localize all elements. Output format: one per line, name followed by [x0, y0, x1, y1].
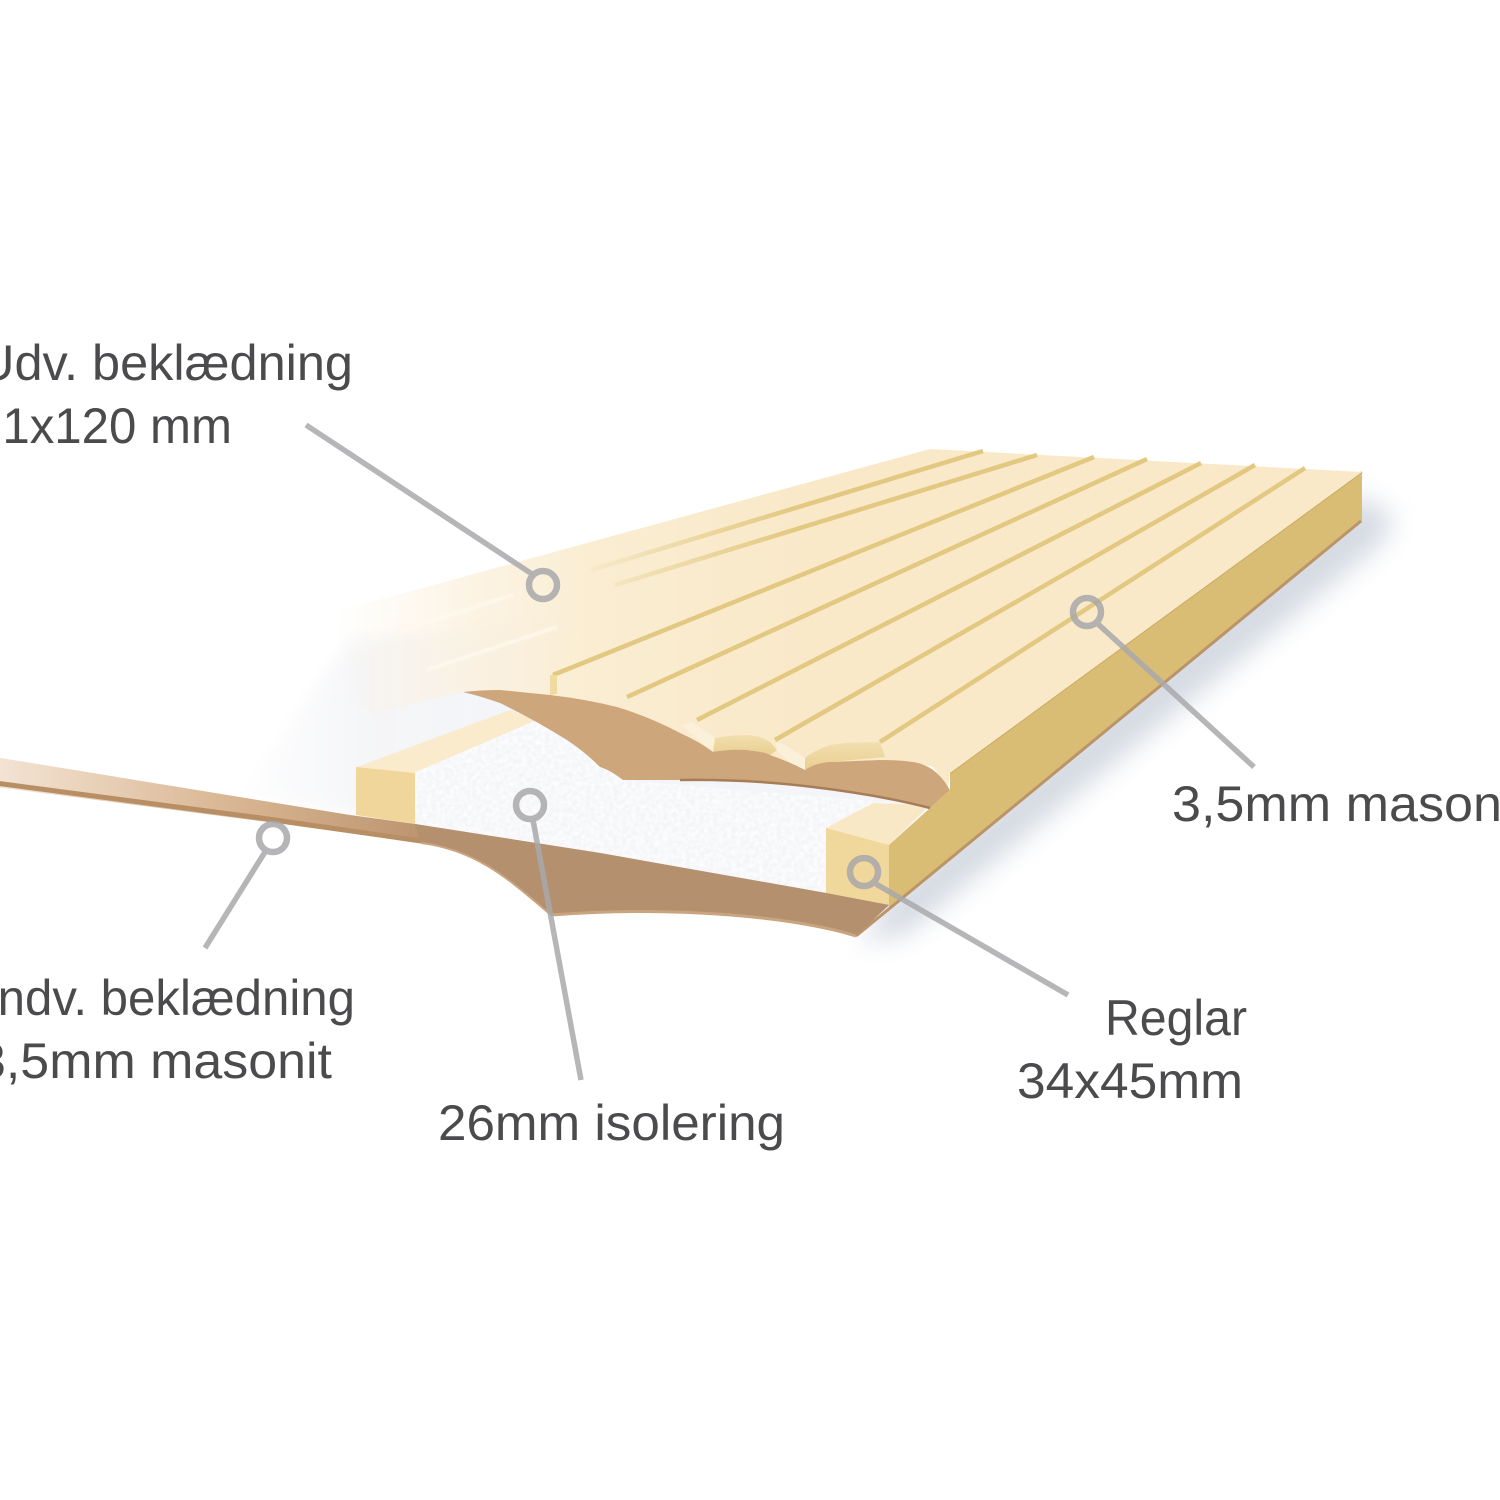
- leader: outer masonite: [1073, 598, 1254, 767]
- label: joist: Reglar: [1105, 990, 1247, 1046]
- side edge: [889, 472, 1362, 909]
- masonite underside edge: [680, 780, 930, 808]
- side edge highlight: [950, 472, 1362, 773]
- outer masonite cut: [463, 690, 950, 808]
- board grooves: [553, 451, 1305, 742]
- outer cladding top surface: [335, 449, 1362, 787]
- leader: insulation: [516, 791, 581, 1080]
- label: joist: [1017, 990, 1247, 1109]
- label: insulation: 26mm isolering: [438, 1095, 785, 1151]
- label: joist: 34x45mm: [1017, 1053, 1243, 1109]
- cast shadow: [860, 495, 1395, 942]
- right joist: [826, 803, 930, 905]
- leader: joist: [850, 858, 1068, 995]
- label: outer cladding: [0, 335, 353, 454]
- bottom side edge: [856, 521, 1361, 936]
- inner masonite board: [0, 757, 889, 936]
- left joist: [356, 710, 537, 824]
- faint board streaks: [393, 595, 557, 670]
- leader: inner cladding: [205, 824, 287, 948]
- board profile notches: [713, 735, 885, 770]
- leader: outer cladding: [306, 425, 557, 599]
- board profile facets: [550, 675, 805, 770]
- insulation layer: [240, 620, 940, 895]
- label: inner cladding: [0, 970, 355, 1089]
